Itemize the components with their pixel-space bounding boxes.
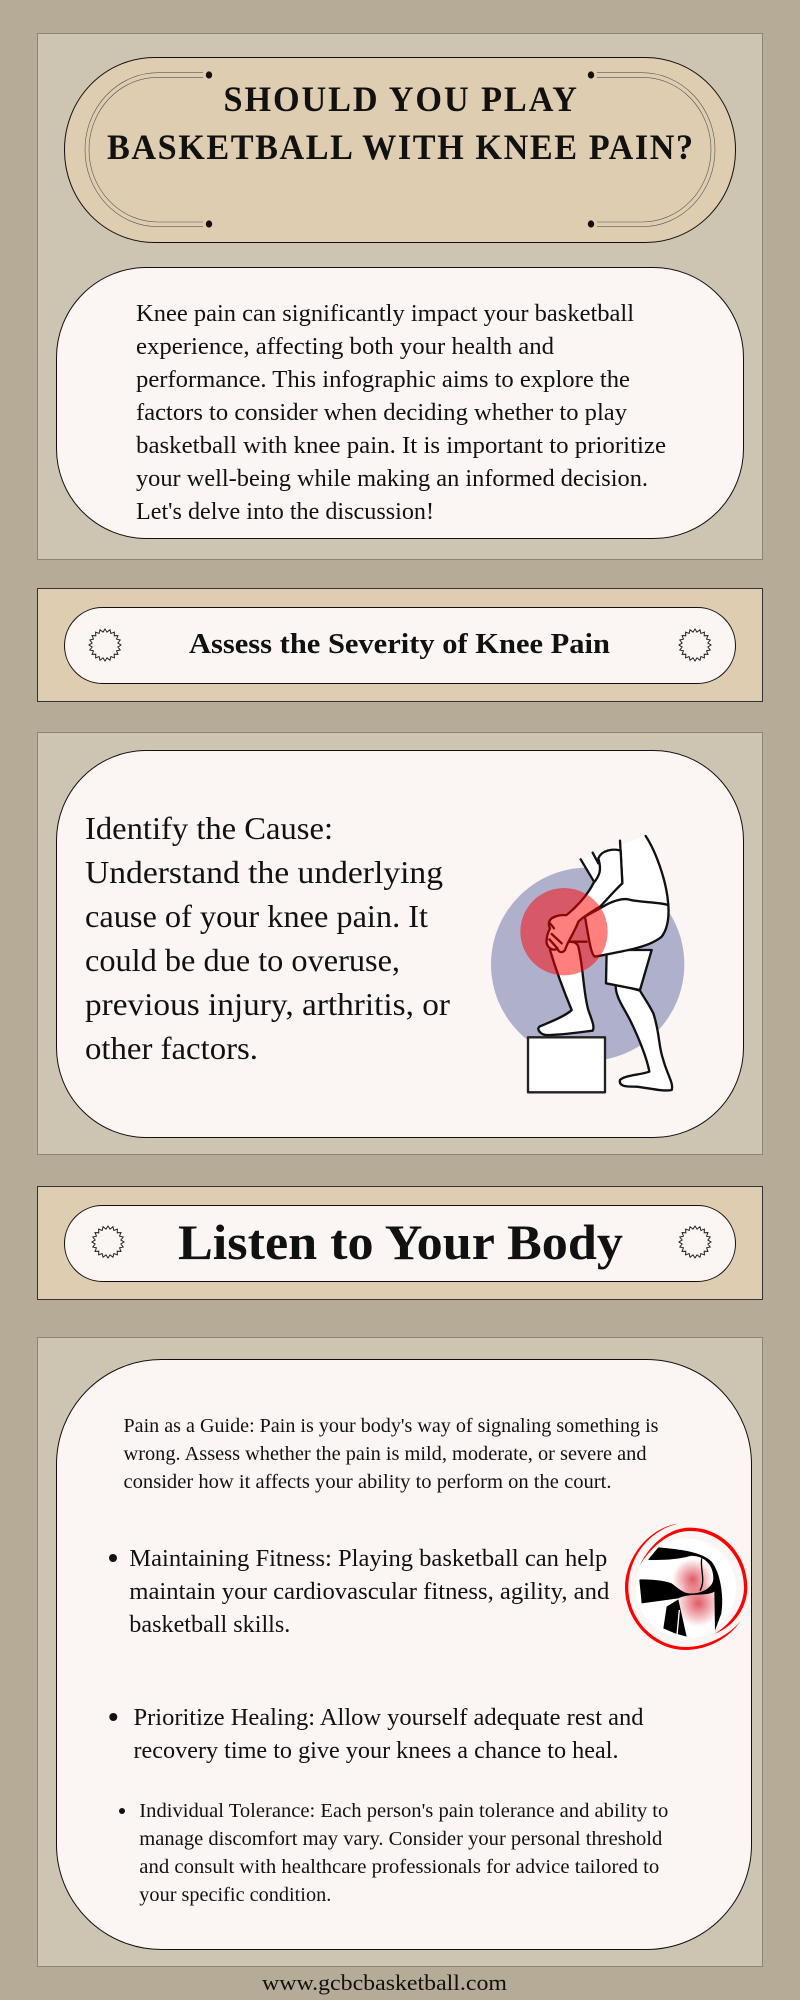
introduction text: experience, affecting both your health and <box>136 334 554 360</box>
title text <box>107 79 693 167</box>
introduction text <box>136 301 666 525</box>
title banner <box>64 58 736 242</box>
introduction text: basketball with knee pain. It is important to prioritize <box>136 433 666 459</box>
bullet: prioritize healing: recovery time to give your knees a chance to heal. <box>134 1738 618 1764</box>
arm and hand <box>547 850 622 952</box>
bullet: prioritize healing: Prioritize Healing: Allow yourself adequate rest and <box>134 1705 644 1731</box>
text: pain as a guide <box>124 1415 659 1493</box>
thigh <box>585 899 669 957</box>
bullet: individual tolerance: and consult with healthcare professionals for advice tailored to <box>139 1856 659 1878</box>
cause text: Understand the underlying <box>85 854 443 890</box>
introduction text: Knee pain can significantly impact your basketball <box>136 301 634 327</box>
introduction text: factors to consider when deciding whether to play <box>136 400 627 426</box>
introduction text: Let's delve into the discussion! <box>136 499 434 525</box>
bullet: prioritize healing <box>109 1705 644 1764</box>
introduction text: your well-being while making an informed decision. <box>136 466 648 492</box>
bullet: maintaining fitness: basketball skills. <box>129 1612 290 1638</box>
section heading: assess severity: Assess the Severity of Knee Pain <box>189 629 610 660</box>
standing leg <box>616 984 672 1090</box>
icon: knee joint in red ring <box>625 1524 747 1650</box>
raised lower leg <box>538 942 593 1035</box>
introduction text: performance. This infographic aims to explore the <box>136 367 630 393</box>
bullet: maintaining fitness: Maintaining Fitness: Playing basketball can help <box>129 1546 607 1572</box>
text: pain as a guide: wrong. Assess whether the pain is mild, moderate, or severe and <box>124 1443 646 1465</box>
bullet: individual tolerance: Individual Tolerance: Each person's pain tolerance and ability to <box>139 1800 668 1822</box>
introduction card <box>56 268 744 538</box>
panel: listen to your body details <box>38 1338 762 1966</box>
panel: identify the cause <box>38 732 762 1154</box>
title text: BASKETBALL WITH KNEE PAIN? <box>107 127 693 167</box>
cause text: other factors. <box>85 1030 258 1066</box>
cause text: cause of your knee pain. It <box>85 898 428 934</box>
bullet: maintaining fitness: maintain your cardiovascular fitness, agility, and <box>129 1579 609 1605</box>
bullet: maintaining fitness <box>109 1546 609 1638</box>
text: pain as a guide: consider how it affects your ability to perform on the court. <box>124 1471 612 1493</box>
bullet: individual tolerance: your specific condition. <box>139 1884 331 1906</box>
cause text <box>85 810 450 1066</box>
panel: title and introduction <box>38 34 762 560</box>
footer website: www.gcbcbasketball.com <box>262 1970 507 1995</box>
bullet: individual tolerance: manage discomfort may vary. Consider your personal threshold <box>139 1828 662 1850</box>
section heading: assess severity <box>38 588 762 702</box>
cause text: Identify the Cause: <box>85 810 333 846</box>
icon: person holding knee on a box <box>491 836 684 1092</box>
box <box>528 1037 605 1092</box>
text: pain as a guide: Pain as a Guide: Pain is your body's way of signaling something is <box>124 1415 659 1437</box>
torso <box>581 836 668 907</box>
shorts leg <box>606 950 652 990</box>
bullet: individual tolerance <box>119 1800 668 1906</box>
title text: SHOULD YOU PLAY <box>224 79 577 119</box>
cause text: previous injury, arthritis, or <box>85 986 450 1022</box>
cause text: could be due to overuse, <box>85 942 400 978</box>
section heading: listen to your body <box>38 1186 762 1300</box>
section heading: listen to your body: Listen to Your Body <box>178 1214 623 1270</box>
